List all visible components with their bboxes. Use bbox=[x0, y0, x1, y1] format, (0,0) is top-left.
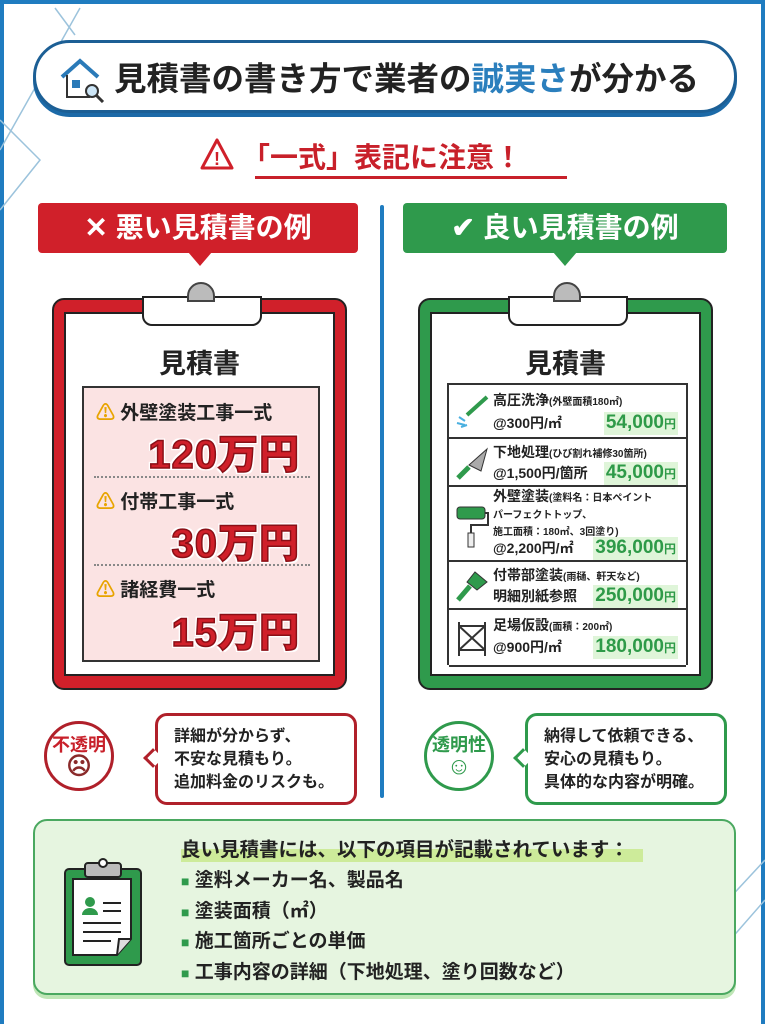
speech bubble: 追加料金のリスクも。 bbox=[174, 774, 334, 791]
items panel: 15万円 bbox=[172, 611, 300, 655]
green banner: ✔ 良い見積書の例 bbox=[451, 212, 679, 243]
speech bubble bbox=[155, 713, 357, 805]
items panel: ⚠ 付帯工事一式 bbox=[96, 492, 234, 513]
speech bubble: 詳細が分からず、 bbox=[174, 728, 301, 745]
icon: clipboard document bbox=[64, 858, 142, 966]
callout: opaque bbox=[44, 713, 357, 805]
row: accessory painting bbox=[449, 562, 686, 610]
clipboard: 見積書 bbox=[525, 349, 606, 379]
callout: transparent: 透明性 bbox=[432, 735, 486, 755]
row: wall painting: 施工面積：180㎡、3回塗り) bbox=[493, 527, 619, 538]
icon: warning triangle: ! bbox=[214, 149, 220, 169]
row: base treatment bbox=[449, 439, 686, 487]
row: scaffolding: @900円/㎡ bbox=[493, 639, 562, 655]
panel: bad estimate bbox=[38, 203, 358, 690]
row: accessory painting: 明細別紙参照 bbox=[493, 588, 577, 604]
row: wall painting: 396,000円 bbox=[595, 537, 676, 558]
icon: house with magnifier bbox=[60, 58, 104, 103]
callout: transparent bbox=[424, 713, 727, 805]
row: high pressure wash: 高圧洗浄(外壁面積180㎡) bbox=[493, 392, 622, 408]
list bbox=[181, 870, 575, 982]
row: high pressure wash: @300円/㎡ bbox=[493, 415, 562, 431]
clipboard bbox=[418, 298, 713, 690]
row: base treatment: 下地処理(ひび割れ補修30箇所) bbox=[493, 444, 647, 460]
row: high pressure wash bbox=[449, 385, 686, 439]
panel: checklist summary bbox=[33, 819, 736, 995]
clipboard bbox=[52, 298, 347, 690]
callout: transparent: ☺ bbox=[447, 753, 471, 780]
speech bubble: 不安な見積もり。 bbox=[174, 751, 302, 768]
row: wall painting: @2,200円/㎡ bbox=[493, 540, 574, 556]
row: wall painting: 外壁塗装(塗料名：日本ペイント bbox=[493, 488, 652, 504]
items panel: ⚠ 外壁塗装工事一式 bbox=[96, 403, 272, 424]
circle badge: 不透明 bbox=[52, 735, 106, 755]
red banner bbox=[38, 203, 358, 253]
row: base treatment: @1,500円/箇所 bbox=[493, 465, 588, 481]
panel: good estimate bbox=[403, 203, 727, 690]
icon: warning triangle bbox=[200, 138, 234, 170]
circle badge: ☹ bbox=[66, 753, 92, 780]
row: scaffolding bbox=[449, 610, 686, 667]
list: ■ 工事内容の詳細（下地処理、塗り回数など） bbox=[181, 962, 575, 982]
itemized table bbox=[447, 383, 688, 665]
items panel bbox=[82, 386, 320, 662]
callout: transparent: 納得して依頼できる、 bbox=[544, 728, 703, 745]
title text: 見積書の書き方で業者の誠実さが分かる bbox=[114, 61, 699, 97]
red banner: ✕ 悪い見積書の例 bbox=[84, 212, 312, 243]
heading: 良い見積書には、以下の項目が記載されています： bbox=[181, 839, 629, 861]
items panel: ⚠ 諸経費一式 bbox=[96, 580, 215, 601]
row: high pressure wash: 54,000円 bbox=[606, 412, 676, 433]
green banner bbox=[403, 203, 727, 253]
callout: transparent: 具体的な内容が明確。 bbox=[544, 774, 704, 791]
list: ■ 施工箇所ごとの単価 bbox=[181, 931, 366, 952]
circle badge bbox=[44, 721, 114, 791]
row: wall painting bbox=[449, 487, 686, 562]
items panel: 120万円 bbox=[148, 433, 300, 477]
row: scaffolding: 足場仮設(面積：200㎡) bbox=[493, 617, 612, 633]
callout: transparent: 安心の見積もり。 bbox=[544, 751, 672, 768]
divider bbox=[380, 205, 384, 798]
list: ■ 塗料メーカー名、製品名 bbox=[181, 870, 404, 891]
heading: 見積書 bbox=[159, 349, 240, 379]
row: wall painting: パーフェクトトップ、 bbox=[493, 510, 592, 521]
row: base treatment: 45,000円 bbox=[606, 462, 676, 483]
warning heading: 「一式」表記に注意！ bbox=[242, 142, 522, 173]
row: accessory painting: 付帯部塗装(雨樋、軒天など) bbox=[493, 567, 640, 583]
items panel: 30万円 bbox=[172, 522, 300, 566]
list: ■ 塗装面積（㎡） bbox=[181, 900, 328, 922]
row: scaffolding: 180,000円 bbox=[595, 636, 676, 657]
row: accessory painting: 250,000円 bbox=[595, 585, 676, 606]
clip bbox=[142, 296, 262, 326]
warning heading bbox=[200, 138, 567, 179]
title pill bbox=[33, 40, 737, 113]
